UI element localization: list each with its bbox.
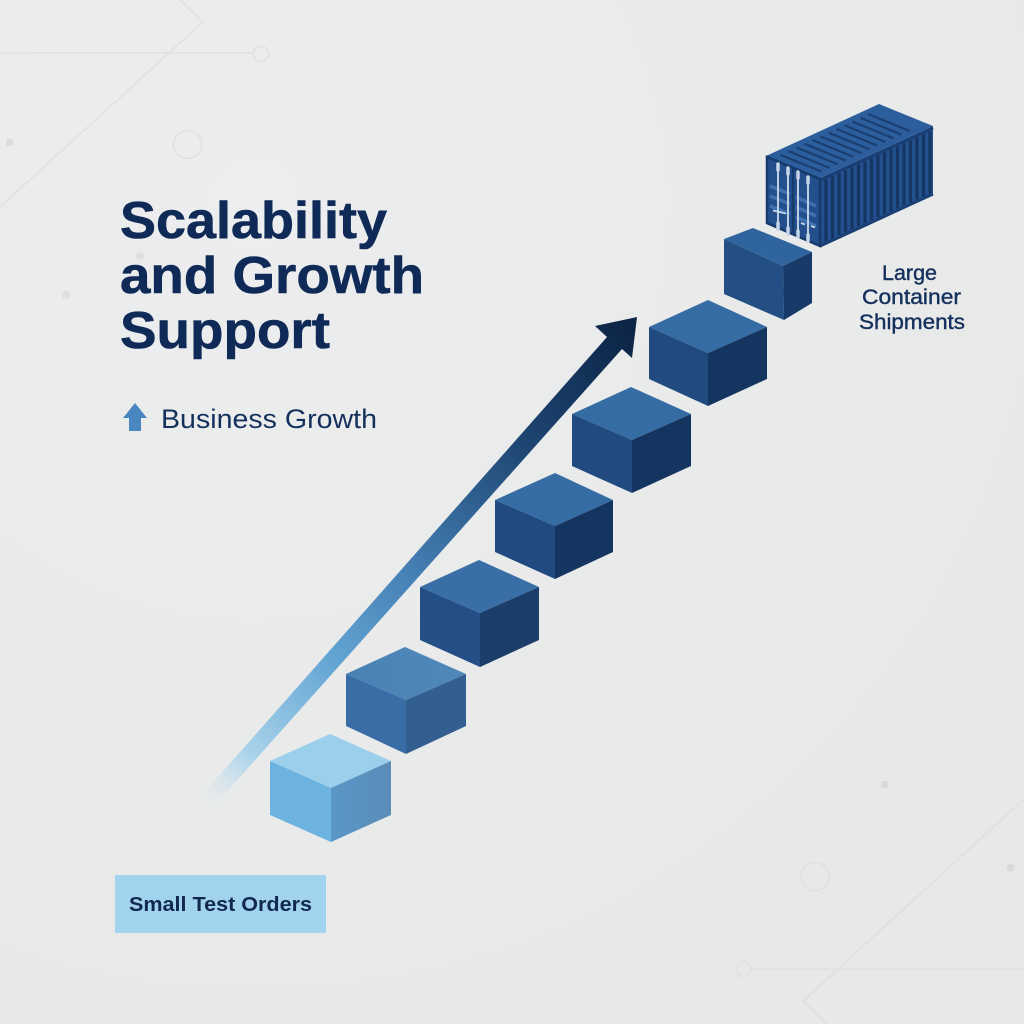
container door panels	[770, 186, 816, 226]
cube 6	[649, 300, 767, 406]
cube 5	[572, 387, 691, 493]
label text: Small Test Orders	[129, 893, 312, 916]
label: large container shipments: Container	[862, 286, 961, 309]
title: and Growth	[120, 247, 424, 305]
container door frame	[767, 157, 820, 246]
container side	[820, 126, 933, 247]
container door bars	[778, 165, 808, 240]
icon: up arrow	[123, 403, 147, 431]
container door latches	[773, 210, 815, 228]
cube 1	[270, 734, 391, 842]
business growth legend	[123, 403, 377, 434]
label background	[115, 875, 326, 933]
label: small test orders	[115, 875, 326, 933]
title	[120, 192, 424, 360]
container door face	[766, 156, 820, 247]
container roof ribs	[780, 114, 910, 172]
label: large container shipments	[859, 262, 965, 334]
cube 4	[495, 473, 613, 579]
cube 3	[420, 560, 539, 667]
label: large container shipments: Shipments	[859, 311, 965, 334]
container roof	[766, 104, 933, 178]
label: large container shipments: Large	[882, 262, 937, 285]
shipping container	[766, 104, 933, 247]
container side ribs	[826, 131, 930, 241]
growth arrow	[202, 317, 637, 805]
cube 7	[724, 228, 812, 320]
container side rails	[820, 128, 933, 246]
title: Scalability	[120, 192, 387, 250]
background circuit decoration: bottom right	[736, 781, 1024, 1024]
title: Support	[120, 302, 330, 360]
legend label: Business Growth	[161, 404, 377, 434]
background circuit decoration: top left	[0, 0, 268, 299]
cube 2	[346, 647, 466, 754]
container door handles	[778, 164, 808, 241]
